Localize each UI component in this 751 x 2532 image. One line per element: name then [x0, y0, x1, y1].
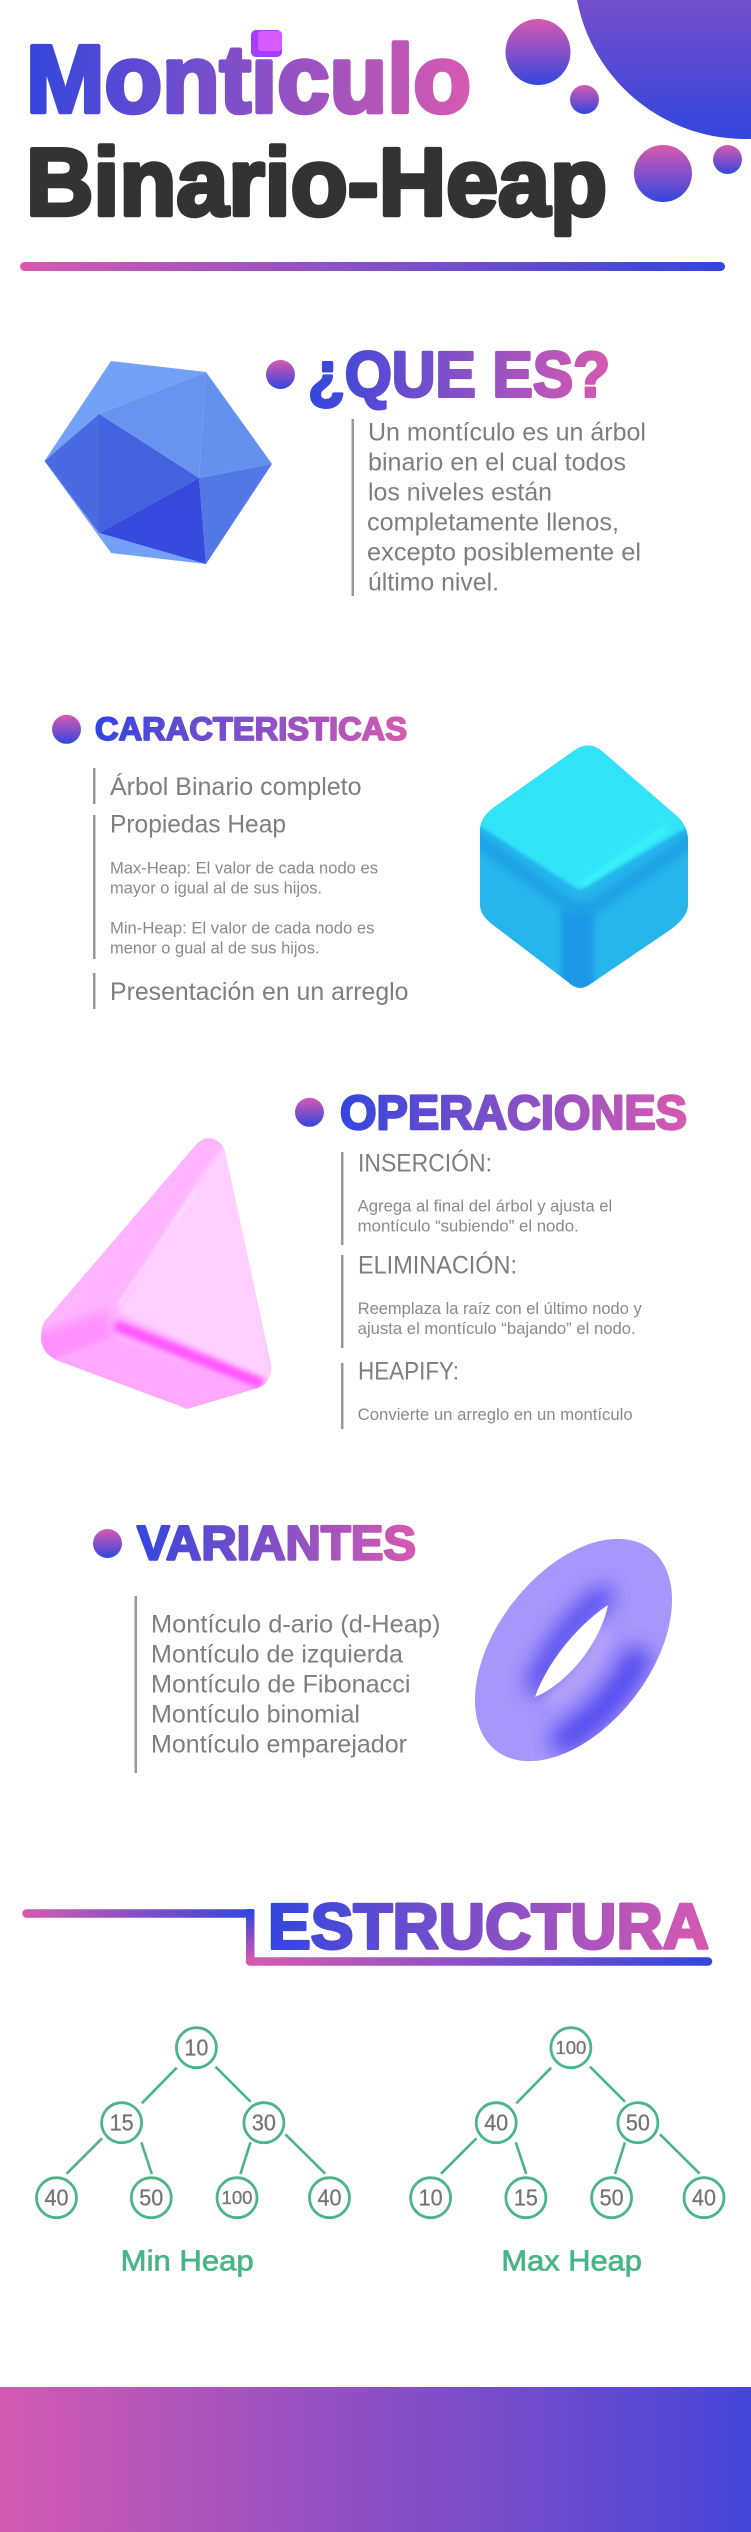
tree edges — [441, 2067, 700, 2174]
item: presentacion: Presentación en un arreglo — [110, 978, 408, 1006]
item: insercion: INSERCIÓN: — [358, 1148, 492, 1177]
variants list: Montículo emparejador — [151, 1731, 407, 1759]
heading: CARACTERISTICAS — [95, 711, 407, 747]
title line 1: Monticulo — [26, 26, 471, 133]
item: heapify: Convierte un arreglo en un montículo — [358, 1406, 633, 1424]
item: insercion: Agrega al final del árbol y ajusta el — [358, 1198, 612, 1216]
item: heapify: HEAPIFY: — [358, 1357, 459, 1385]
diagram label: Max Heap — [501, 2246, 642, 2278]
description text: excepto posiblemente el — [367, 539, 641, 567]
tree nodes: 40 — [692, 2185, 716, 2211]
heading: ¿QUE ES? — [308, 338, 610, 410]
description text — [367, 419, 646, 597]
header panel — [20, 0, 751, 271]
description text: último nivel. — [368, 569, 499, 597]
tree nodes: 50 — [600, 2185, 624, 2211]
tree nodes: 40 — [44, 2185, 68, 2211]
tree edges — [67, 2067, 325, 2174]
variants list: Montículo de izquierda — [151, 1641, 403, 1669]
decorative circle 3 — [634, 145, 692, 202]
item: eliminacion: ajusta el montículo “bajando” el nodo. — [358, 1320, 636, 1338]
heading: VARIANTES — [137, 1518, 416, 1570]
heading bullet — [295, 1098, 324, 1127]
tree nodes: 40 — [484, 2110, 508, 2136]
tree nodes: 15 — [514, 2185, 538, 2211]
tree nodes: 100 — [222, 2188, 252, 2208]
icon: purple torus — [470, 1535, 680, 1765]
heading: ESTRUCTURA — [268, 1890, 709, 1962]
diagram label: Min Heap — [121, 2246, 254, 2278]
description text: los niveles están — [368, 479, 552, 507]
tree nodes: 100 — [555, 2038, 586, 2058]
tree nodes — [36, 2028, 350, 2218]
decorative circle 4 — [713, 145, 742, 174]
tree nodes — [411, 2028, 724, 2218]
item: propiedades heap: Min-Heap: El valor de cada nodo es — [110, 919, 374, 937]
panel: operaciones — [30, 1087, 687, 1429]
icon: blue cube — [480, 746, 688, 988]
heading bullet — [266, 360, 295, 389]
decorative circle 1 — [506, 19, 570, 85]
variants list: Montículo binomial — [151, 1701, 360, 1729]
description text: binario en el cual todos — [368, 449, 626, 477]
heading: OPERACIONES — [340, 1087, 687, 1140]
item: insercion — [341, 1148, 612, 1245]
title line 2: Binario-Heap — [26, 129, 607, 236]
heading bullet — [52, 715, 81, 744]
description text: completamente llenos, — [367, 509, 619, 537]
item: propiedades heap: Propiedas Heap — [110, 811, 286, 839]
description text: Un montículo es un árbol — [368, 419, 646, 447]
heading bullet — [93, 1529, 122, 1558]
item: eliminacion: ELIMINACIÓN: — [358, 1250, 517, 1279]
tree nodes: 10 — [419, 2185, 443, 2211]
item: eliminacion: Reemplaza la raíz con el último nodo y — [358, 1300, 642, 1318]
text bar — [134, 1596, 137, 1773]
item: propiedades heap: menor o gual al de sus hijos. — [110, 939, 320, 957]
item: insercion: montículo “subiendo” el nodo. — [358, 1218, 579, 1236]
variants list: Montículo de Fibonacci — [151, 1671, 410, 1699]
panel: caracteristicas — [52, 711, 700, 1009]
item: propiedades heap: Max-Heap: El valor de cada nodo es — [110, 859, 378, 877]
footer band — [0, 2387, 751, 2532]
decorative large circle — [574, 0, 751, 139]
item: propiedades heap — [93, 811, 378, 959]
diagram: max heap — [411, 2028, 724, 2278]
panel: variantes — [93, 1518, 680, 1773]
tree nodes: 15 — [110, 2110, 134, 2136]
variants list — [151, 1611, 440, 1759]
icon: blue polyhedron — [44, 361, 272, 564]
item: propiedades heap: mayor o igual al de sus hijos. — [110, 879, 322, 897]
tree nodes: 50 — [626, 2110, 650, 2136]
icon: pink pyramid — [40, 1138, 272, 1409]
tree nodes: 10 — [184, 2035, 208, 2061]
variants list: Montículo d-ario (d-Heap) — [151, 1611, 440, 1639]
item: arbol binario: Árbol Binario completo — [110, 772, 362, 801]
item: eliminacion — [341, 1250, 642, 1348]
tree nodes: 30 — [252, 2110, 276, 2136]
panel: estructura — [26, 1890, 724, 2278]
panel: que es — [44, 338, 646, 597]
tree nodes: 40 — [318, 2185, 342, 2211]
header rule — [20, 262, 725, 271]
item: heapify — [341, 1357, 633, 1429]
heading connector line — [26, 1909, 708, 1962]
text bar — [352, 419, 354, 596]
diagram: min heap — [36, 2028, 350, 2278]
tree nodes: 50 — [139, 2185, 163, 2211]
decorative circle 2 — [570, 85, 599, 114]
icon: small purple cube — [251, 30, 282, 57]
